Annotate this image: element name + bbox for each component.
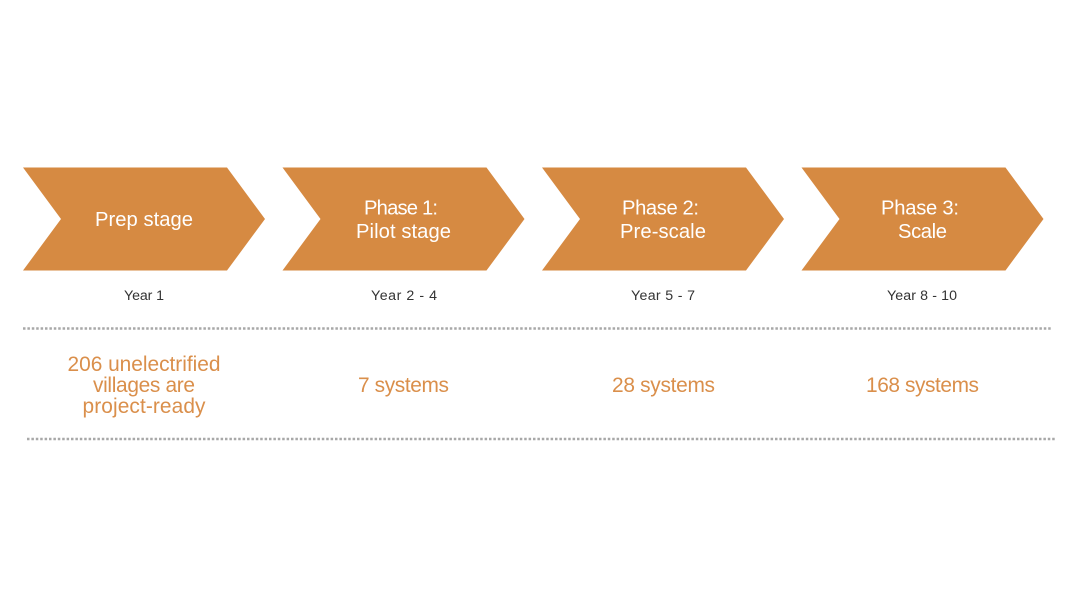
chevron: prep stage: Prep stage	[95, 209, 193, 231]
chevron: phase 3 scale: Phase 3:	[881, 198, 959, 220]
chevron: phase 1 pilot stage: Pilot stage	[356, 221, 451, 243]
chevron: phase 2 pre-scale: Pre-scale	[620, 221, 706, 243]
chevron: phase 3 scale	[802, 168, 1044, 270]
label: year 1: Year 1	[124, 288, 164, 304]
outcome: prep stage villages: project-ready	[82, 395, 206, 418]
chevron: phase 2 pre-scale: Phase 2:	[622, 198, 699, 220]
outcome: prep stage villages: 206 unelectrified	[68, 353, 220, 376]
chevron: prep stage	[23, 168, 265, 270]
outcome: phase 1 systems: 7 systems	[358, 374, 449, 397]
chevron: phase 1 pilot stage: Phase 1:	[364, 198, 438, 220]
chevron: phase 2 pre-scale	[542, 168, 784, 270]
outcome: prep stage villages: villages are	[93, 374, 195, 397]
label: year 2-4: Year 2 - 4	[371, 288, 437, 304]
chevron: phase 1 pilot stage	[282, 168, 524, 270]
label: year 5-7: Year 5 - 7	[631, 288, 695, 304]
outcome: prep stage villages	[68, 353, 220, 418]
outcome: phase 3 systems: 168 systems	[866, 374, 979, 397]
label: year 8-10: Year 8 - 10	[887, 288, 957, 304]
chevron: phase 3 scale: Scale	[898, 221, 947, 243]
outcome: phase 2 systems: 28 systems	[612, 374, 715, 397]
